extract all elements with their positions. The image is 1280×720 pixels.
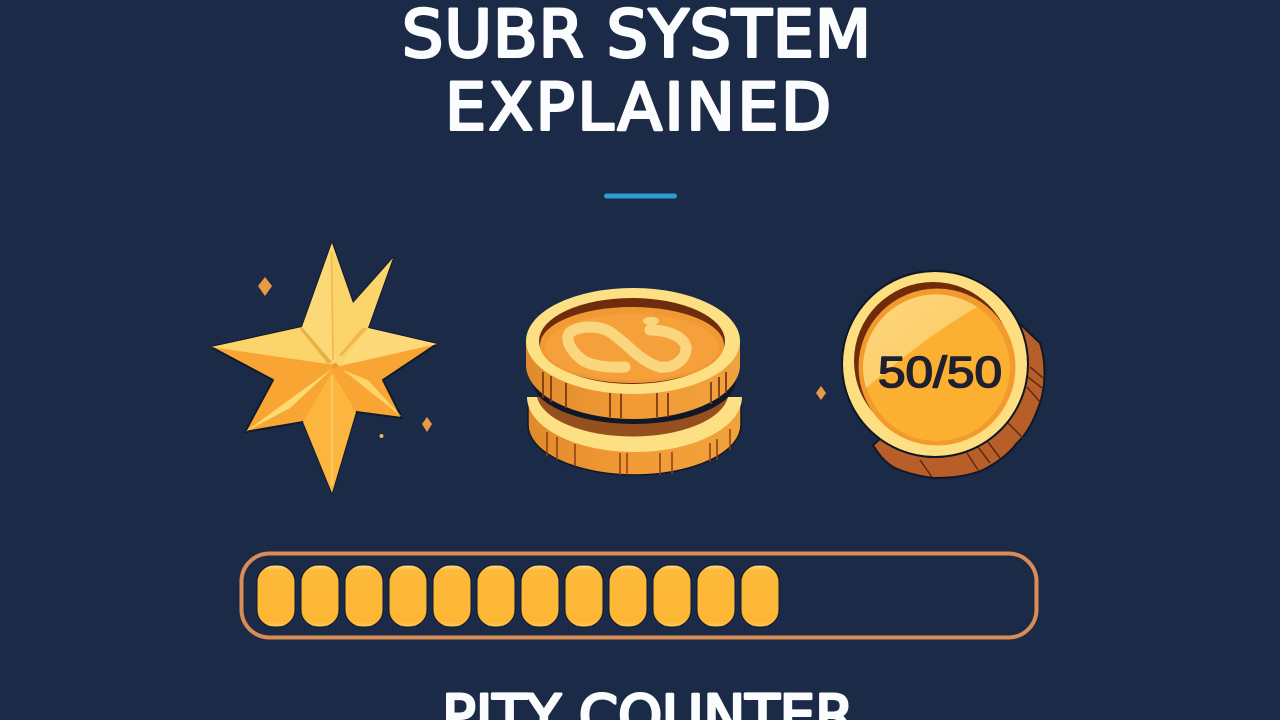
title: EXPLAINED: [445, 70, 831, 146]
bar outline: [242, 554, 1036, 638]
coin gloss: [863, 294, 977, 388]
creases: [300, 327, 332, 364]
coin edge: [873, 322, 1044, 478]
filled segments: [257, 565, 779, 627]
pity progress bar: [242, 554, 1036, 638]
upper coin shadow: [532, 372, 736, 424]
title: [402, 0, 871, 146]
star base: [211, 243, 437, 493]
highlights: [245, 368, 333, 432]
upper light facets: [211, 243, 437, 366]
icon: gold star: [211, 243, 437, 493]
ribbon emblem: [568, 327, 686, 367]
bottom strip: [303, 372, 356, 493]
sparkles: [258, 277, 826, 438]
upper coin: [526, 288, 740, 419]
icon: coin stack: [526, 288, 742, 475]
accent divider: [604, 194, 677, 198]
icon: 50/50 coin: [841, 270, 1044, 478]
lower coin: [527, 397, 742, 475]
50/50 label: 50/50: [878, 348, 1002, 397]
